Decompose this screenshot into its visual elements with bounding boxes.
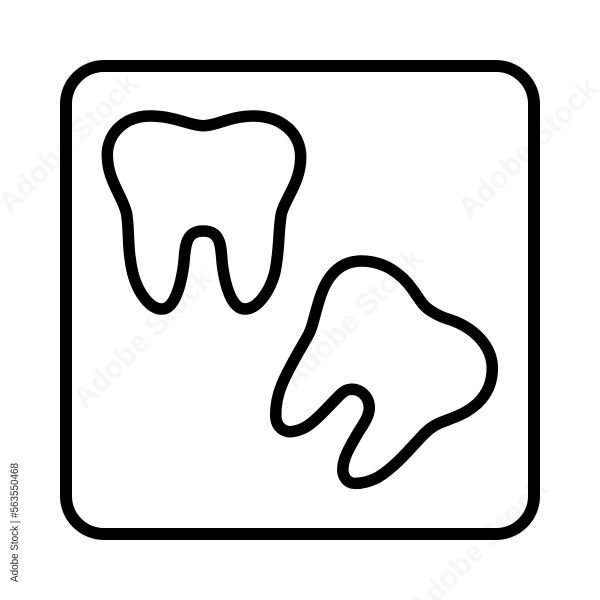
icon: tilted tooth (276, 261, 492, 483)
watermark credit text: Adobe Stock | #563550468 (9, 463, 21, 582)
faint diagonal watermark: Adobe Stock (277, 242, 430, 395)
icon: upright tooth (107, 116, 301, 309)
faint diagonal watermark: Adobe Stock (67, 262, 220, 415)
icon: rounded square x-ray frame (66, 66, 534, 534)
